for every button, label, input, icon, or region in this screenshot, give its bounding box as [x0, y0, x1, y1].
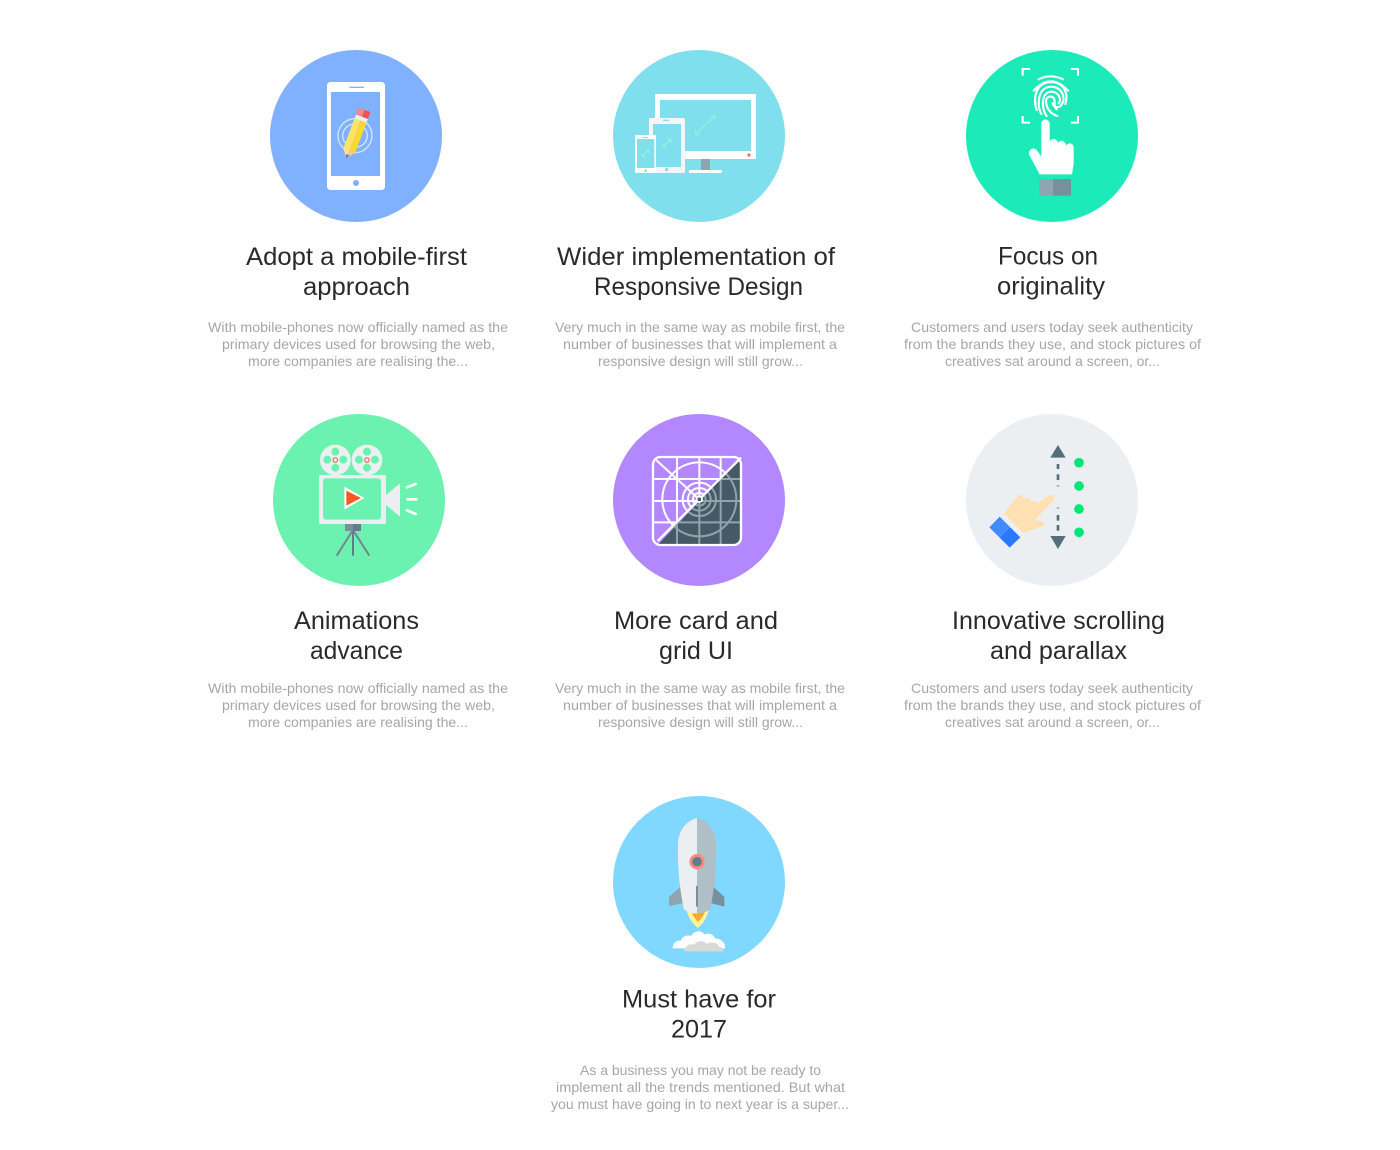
heading: animations advance: advance [310, 637, 403, 665]
heading: wider implementation of responsive design: Responsive Design [594, 273, 803, 301]
heading: adopt a mobile-first approach: approach [303, 273, 410, 301]
text: card and grid description: Very much in the same way as mobile first, the [555, 680, 845, 696]
heading: innovative scrolling and parallax: Innovative scrolling [952, 607, 1165, 635]
icon: responsive devices [613, 50, 785, 222]
icon: scrolling hand [966, 414, 1138, 586]
icon: film camera [273, 414, 445, 586]
text: responsive design description: Very much in the same way as mobile first, the [555, 319, 845, 335]
panel: more card and grid UI [555, 414, 845, 730]
heading: must have for 2017: 2017 [671, 1016, 727, 1044]
panel: must have for 2017 [551, 796, 849, 1112]
text: animations description: With mobile-phones now officially named as the [208, 680, 508, 696]
text: must have description [551, 1062, 849, 1112]
heading: focus on originality: originality [997, 272, 1106, 300]
heading: focus on originality [997, 242, 1106, 300]
panel: innovative scrolling and parallax [904, 414, 1201, 730]
heading: innovative scrolling and parallax: and parallax [990, 637, 1127, 665]
icon: rocket [613, 796, 785, 968]
heading: animations advance [294, 607, 419, 665]
heading: more card and grid UI [614, 607, 778, 665]
text: must have description: implement all the trends mentioned. But what [556, 1079, 845, 1095]
text: card and grid description: number of businesses that will implement a [563, 697, 837, 713]
heading: focus on originality: Focus on [998, 242, 1098, 270]
text: originality description: from the brands they use, and stock pictures of [904, 336, 1201, 352]
panel: focus on originality [904, 50, 1201, 369]
text: must have description: you must have going in to next year is a super... [551, 1096, 849, 1112]
icon: fingerprint and hand [966, 50, 1138, 222]
heading: wider implementation of responsive design [557, 243, 835, 301]
text: responsive design description [555, 319, 845, 369]
text: scrolling description: from the brands they use, and stock pictures of [904, 697, 1201, 713]
panel: adopt a mobile-first approach [208, 50, 508, 369]
text: animations description: primary devices used for browsing the web, [222, 697, 495, 713]
heading: adopt a mobile-first approach: Adopt a mobile-first [246, 243, 467, 271]
heading: animations advance: Animations [294, 607, 419, 635]
text: mobile-first description: primary devices used for browsing the web, [222, 336, 495, 352]
text: mobile-first description: With mobile-phones now officially named as the [208, 319, 508, 335]
text: mobile-first description [208, 319, 508, 369]
text: mobile-first description: more companies are realising the... [248, 353, 468, 369]
heading: must have for 2017 [622, 986, 776, 1044]
text: scrolling description: Customers and users today seek authenticity [911, 680, 1193, 696]
text: scrolling description [904, 680, 1201, 730]
heading: must have for 2017: Must have for [622, 986, 776, 1014]
icon: phone with pencil [270, 50, 442, 222]
heading: more card and grid UI: grid UI [659, 637, 733, 665]
text: responsive design description: number of businesses that will implement a [563, 336, 837, 352]
text: originality description: Customers and users today seek authenticity [911, 319, 1193, 335]
heading: more card and grid UI: More card and [614, 607, 778, 635]
heading: adopt a mobile-first approach [246, 243, 467, 301]
text: animations description [208, 680, 508, 730]
text: originality description [904, 319, 1201, 369]
panel: animations advance [208, 414, 508, 730]
icon: grid template [613, 414, 785, 586]
text: originality description: creatives sat around a screen, or... [945, 353, 1160, 369]
text: scrolling description: creatives sat around a screen, or... [945, 714, 1160, 730]
text: animations description: more companies are realising the... [248, 714, 468, 730]
text: card and grid description: responsive design will still grow... [598, 714, 803, 730]
text: responsive design description: responsive design will still grow... [598, 353, 803, 369]
heading: wider implementation of responsive design: Wider implementation of [557, 243, 835, 271]
panel: wider implementation of responsive design [555, 50, 845, 369]
text: card and grid description [555, 680, 845, 730]
text: must have description: As a business you may not be ready to [580, 1062, 821, 1078]
heading: innovative scrolling and parallax [952, 607, 1165, 665]
